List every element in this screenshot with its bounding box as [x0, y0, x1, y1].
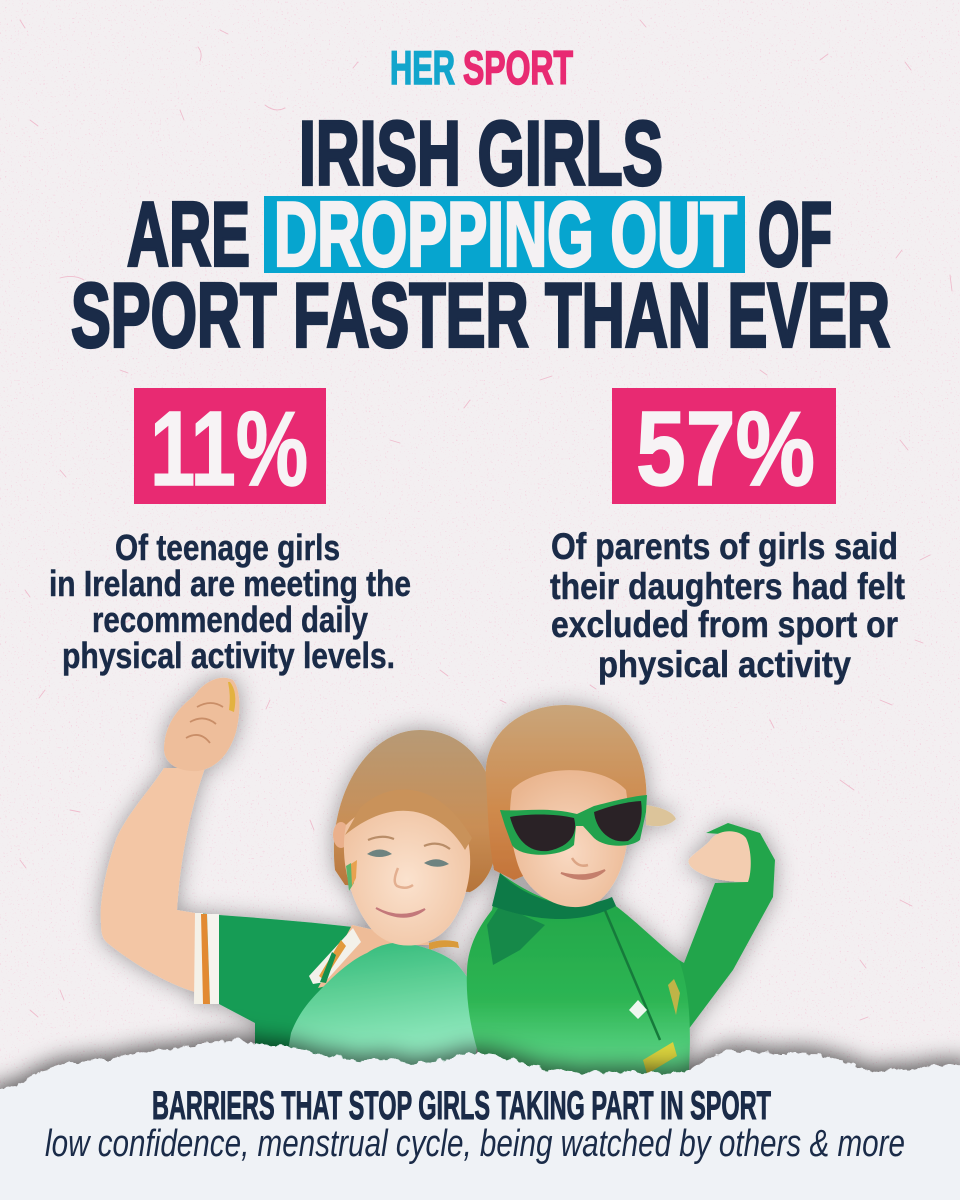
- text block: 57% description: Of parents of girls said: [551, 526, 898, 567]
- left girl neck: [318, 925, 440, 988]
- left girl face paint: [346, 863, 354, 891]
- left girl ear: [333, 822, 349, 848]
- title: ARE: [127, 184, 250, 286]
- right girl fist: [688, 831, 751, 882]
- left girl fist: [164, 678, 239, 771]
- text block: 11% description: in Ireland are meeting the: [49, 563, 411, 604]
- left girl face: [344, 800, 470, 946]
- text block: 57% description: their daughters had felt: [550, 566, 905, 607]
- text block: 57% description: physical activity: [598, 644, 851, 685]
- right girl jacket: [467, 873, 690, 1085]
- sunglasses: [500, 795, 647, 855]
- left girl eyes and mouth: [367, 837, 450, 917]
- right girl collar: [492, 873, 616, 919]
- title: [71, 104, 890, 366]
- left girl arm: [101, 768, 205, 992]
- stat panel: 57%: 57%: [636, 390, 815, 508]
- right girl hair: [486, 705, 646, 880]
- logo: Her Sport: [390, 41, 573, 94]
- logo: Her Sport: HER: [390, 41, 455, 94]
- torn paper banner: [0, 1040, 960, 1200]
- text block: 57% description: excluded from sport or: [551, 604, 898, 645]
- text block: 11% description: [49, 527, 411, 676]
- photo: two girls flexing: [101, 678, 775, 1085]
- left girl hair back: [334, 730, 498, 892]
- text block: 11% description: recommended daily: [92, 599, 368, 640]
- right girl nose and smile: [561, 858, 605, 879]
- text block: 57% description: [550, 526, 905, 685]
- shoulder patch: [487, 905, 545, 965]
- right girl hair clip: [646, 805, 676, 826]
- highlight: dropping out: DROPPING OUT: [274, 184, 737, 286]
- title: OF: [758, 184, 832, 286]
- left girl shirt: [195, 913, 420, 1070]
- jacket badge: [629, 979, 680, 1074]
- right girl face: [510, 770, 628, 907]
- text block: 11% description: physical activity levels.: [62, 635, 395, 676]
- right girl flexed arm: [670, 823, 775, 1040]
- highlight: dropping out: [264, 184, 745, 286]
- stat panel: 11%: 11%: [150, 390, 308, 508]
- collar trim: [309, 928, 459, 984]
- left girl shoulder: [285, 943, 479, 1068]
- text block: 11% description: Of teenage girls: [115, 527, 340, 568]
- title: IRISH GIRLS: [299, 104, 663, 204]
- logo: Her Sport: SPORT: [463, 41, 573, 94]
- sleeve stripes: [194, 913, 219, 1004]
- zip: [604, 908, 660, 1040]
